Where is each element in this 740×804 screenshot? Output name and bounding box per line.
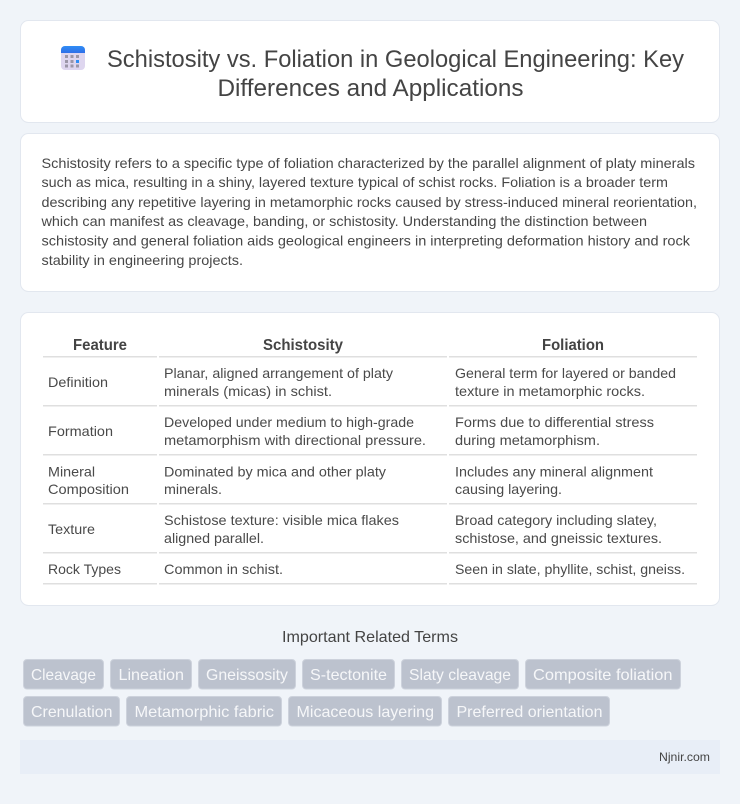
row: texture: Broad category including slatey,: [455, 512, 657, 528]
text block: summary: stability in engineering projects.: [42, 252, 243, 268]
title: [107, 46, 684, 102]
related term tags: Gneissosity: [206, 667, 288, 684]
row: definition: [48, 365, 676, 399]
row: mineral composition: Mineral: [48, 464, 95, 480]
text block: summary: schistosity and general foliation aids geological engineers in interpreting deformation history and rock: [42, 232, 691, 248]
row: rock types: [48, 561, 685, 577]
row: rock types: Rock Types: [48, 561, 121, 577]
text block: summary: such as mica, resulting in a shiny, layered texture typical of schist rocks. Foliation is a broader term: [42, 174, 668, 190]
row: definition: texture in metamorphic rocks.: [455, 383, 645, 399]
related term tags: Metamorphic fabric: [134, 704, 274, 721]
row: definition: minerals (micas) in schist.: [164, 383, 332, 399]
related term tags: Crenulation: [31, 704, 112, 721]
related term tags: S-tectonite: [310, 667, 387, 684]
row: mineral composition: causing layering.: [455, 481, 562, 497]
row: rock types: Common in schist.: [164, 561, 283, 577]
related term tags: Slaty cleavage: [409, 667, 511, 684]
row: texture: Texture: [48, 521, 95, 537]
text block: summary: which can manifest as cleavage, banding, or schistosity. Understanding the distinction between: [40, 213, 647, 229]
row: texture: aligned parallel.: [164, 530, 264, 546]
related term tags: Composite foliation: [533, 667, 672, 684]
row: formation: [48, 414, 654, 448]
row: texture: [48, 512, 662, 546]
row: mineral composition: minerals.: [164, 481, 222, 497]
row: definition: Planar, aligned arrangement of platy: [164, 365, 393, 381]
row: rock types: Seen in slate, phyllite, schist, gneiss.: [455, 561, 685, 577]
row: texture: schistose, and gneissic textures.: [455, 530, 662, 546]
related term tags: [24, 660, 680, 726]
row: mineral composition: Composition: [48, 481, 129, 497]
row: mineral composition: Dominated by mica and other platy: [164, 464, 386, 480]
row: texture: Schistose texture: visible mica flakes: [164, 512, 399, 528]
row: definition: Definition: [48, 374, 108, 390]
row: formation: Forms due to differential stress: [455, 414, 654, 430]
related term tags: Cleavage: [31, 667, 96, 684]
footer: [20, 740, 720, 774]
table header: Foliation: [542, 337, 604, 354]
heading: related terms: Important Related Terms: [282, 629, 458, 646]
row: formation: metamorphism with directional pressure.: [164, 432, 426, 448]
table header: Schistosity: [263, 337, 343, 354]
panel: title card: [20, 20, 720, 122]
related term tags: Lineation: [118, 667, 184, 684]
row: definition: General term for layered or banded: [455, 365, 676, 381]
text block: summary: Schistosity refers to a specific type of foliation characterized by the parallel alignment of platy minerals: [42, 155, 695, 171]
related term tags: Preferred orientation: [456, 704, 602, 721]
related term tags: Micaceous layering: [296, 704, 434, 721]
title: Schistosity vs. Foliation in Geological Engineering: Key: [107, 46, 684, 73]
title: Differences and Applications: [218, 75, 524, 102]
text block: summary: [40, 155, 697, 268]
table header: Feature: [73, 337, 127, 354]
text block: summary: describing any repetitive layering in metamorphic rocks caused by stress-induced mineral reorientation,: [42, 194, 697, 210]
row: mineral composition: Includes any mineral alignment: [455, 464, 653, 480]
panel: summary paragraph: [20, 134, 720, 292]
row: formation: Developed under medium to high-grade: [164, 414, 414, 430]
table header: [73, 337, 604, 354]
panel: comparison table: [20, 312, 720, 606]
row: formation: during metamorphism.: [455, 432, 600, 448]
row: mineral composition: [48, 464, 653, 497]
footer credit: Njnir.com: [659, 750, 710, 764]
icon: calendar: [61, 46, 85, 70]
row: formation: Formation: [48, 423, 113, 439]
